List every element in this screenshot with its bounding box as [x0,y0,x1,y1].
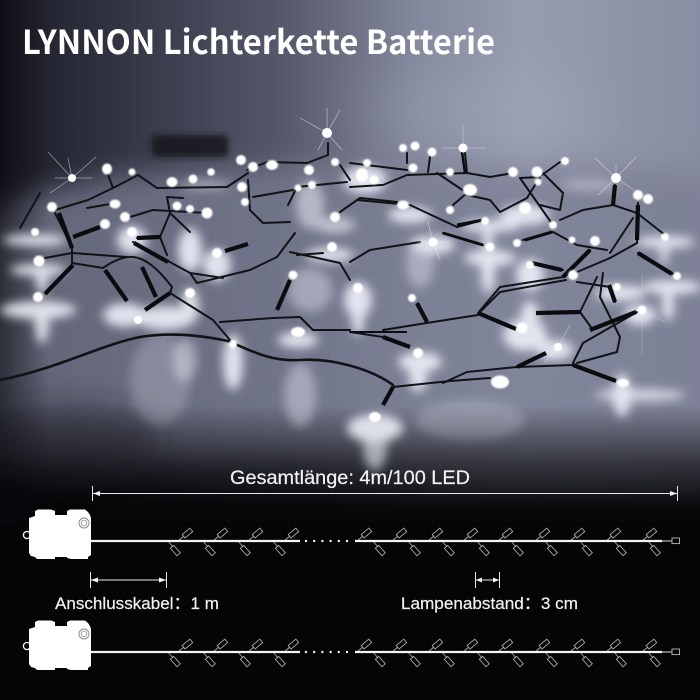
light string: dark wires [0,143,675,405]
label: lamp spacing: Lampenabstand：3 cm [401,594,578,613]
left section wires [20,143,350,340]
thick bulb holders [45,152,672,405]
diagram: upper light string with battery box [23,510,679,559]
floor light reflections [0,166,700,471]
star-flare LEDs [48,108,665,362]
dimension arrow: connection cable [90,572,166,588]
right section wires [340,153,675,387]
diagram: lower light string with battery box [23,620,679,670]
LED bulbs [31,142,681,422]
total length label: Gesamtlänge: 4m/100 LED [230,467,470,489]
dimension arrow: total length [92,486,678,501]
title: LYNNON Lichterkette Batterie [22,16,495,64]
label: connection cable: Anschlusskabel：1 m [55,594,219,613]
dimension arrow: lamp spacing [476,572,500,588]
main lead cable [0,334,393,385]
